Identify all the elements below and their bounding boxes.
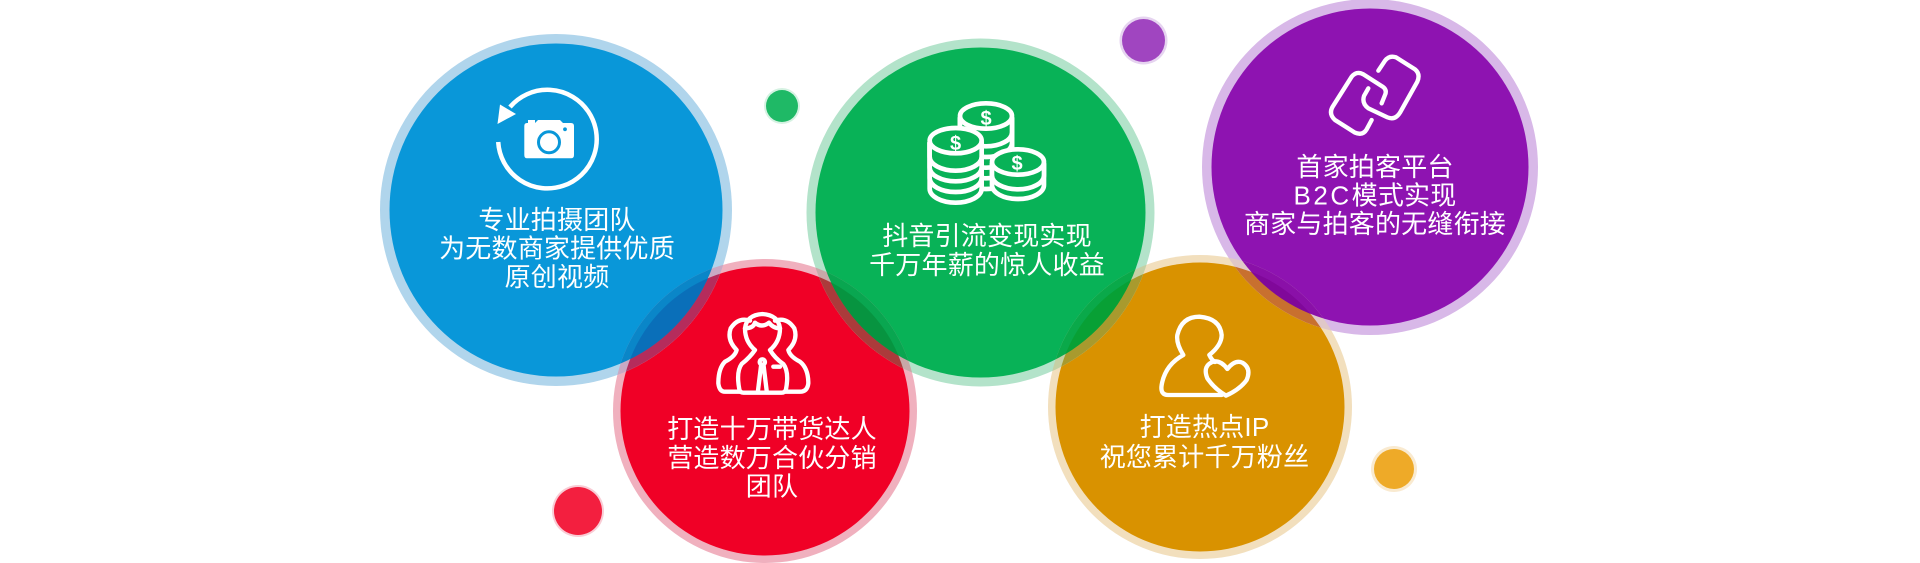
panel: blue circle <box>380 34 732 386</box>
icon: dollar signs: $ <box>1011 153 1023 175</box>
text: green panel: 抖音引流变现实现 <box>882 221 1092 251</box>
text: blue panel: 原创视频 <box>505 262 609 292</box>
text: orange panel: 祝您累计千万粉丝 <box>1100 442 1309 472</box>
dot: small orange <box>1371 446 1417 492</box>
text: red panel: 打造十万带货达人 <box>667 414 877 444</box>
panel: orange circle <box>1048 255 1352 559</box>
text: red panel: 营造数万合伙分销 <box>667 443 877 473</box>
icon: stacks of coins <box>930 103 1044 203</box>
text: purple panel: B2C模式实现 <box>1294 180 1456 210</box>
icon: team of people <box>718 314 808 393</box>
dot: small purple <box>1120 16 1168 64</box>
text: orange panel: 打造热点IP <box>1140 412 1269 442</box>
icon: chain link <box>1331 57 1419 134</box>
text: blue panel: 专业拍摄团队 <box>478 205 636 235</box>
text: blue panel: 为无数商家提供优质 <box>439 234 675 264</box>
panel: red circle <box>613 259 917 563</box>
dot: small green <box>764 88 800 124</box>
icon: person with heart <box>1161 317 1248 396</box>
panel: green circle <box>806 38 1154 386</box>
icon: dollar signs: $ <box>950 133 961 155</box>
text: green panel: 千万年薪的惊人收益 <box>869 250 1105 280</box>
text: purple panel: 首家拍客平台 <box>1296 152 1454 182</box>
overlaps: blended circle intersections <box>618 258 1332 375</box>
icon: rotating camera <box>498 90 597 188</box>
panel: purple circle <box>1202 0 1538 335</box>
icon: dollar signs <box>950 108 1023 175</box>
icon: dollar signs: $ <box>980 108 992 130</box>
text: red panel: 团队 <box>746 472 798 502</box>
dot: small red <box>552 485 604 537</box>
text: purple panel: 商家与拍客的无缝衔接 <box>1244 209 1506 239</box>
